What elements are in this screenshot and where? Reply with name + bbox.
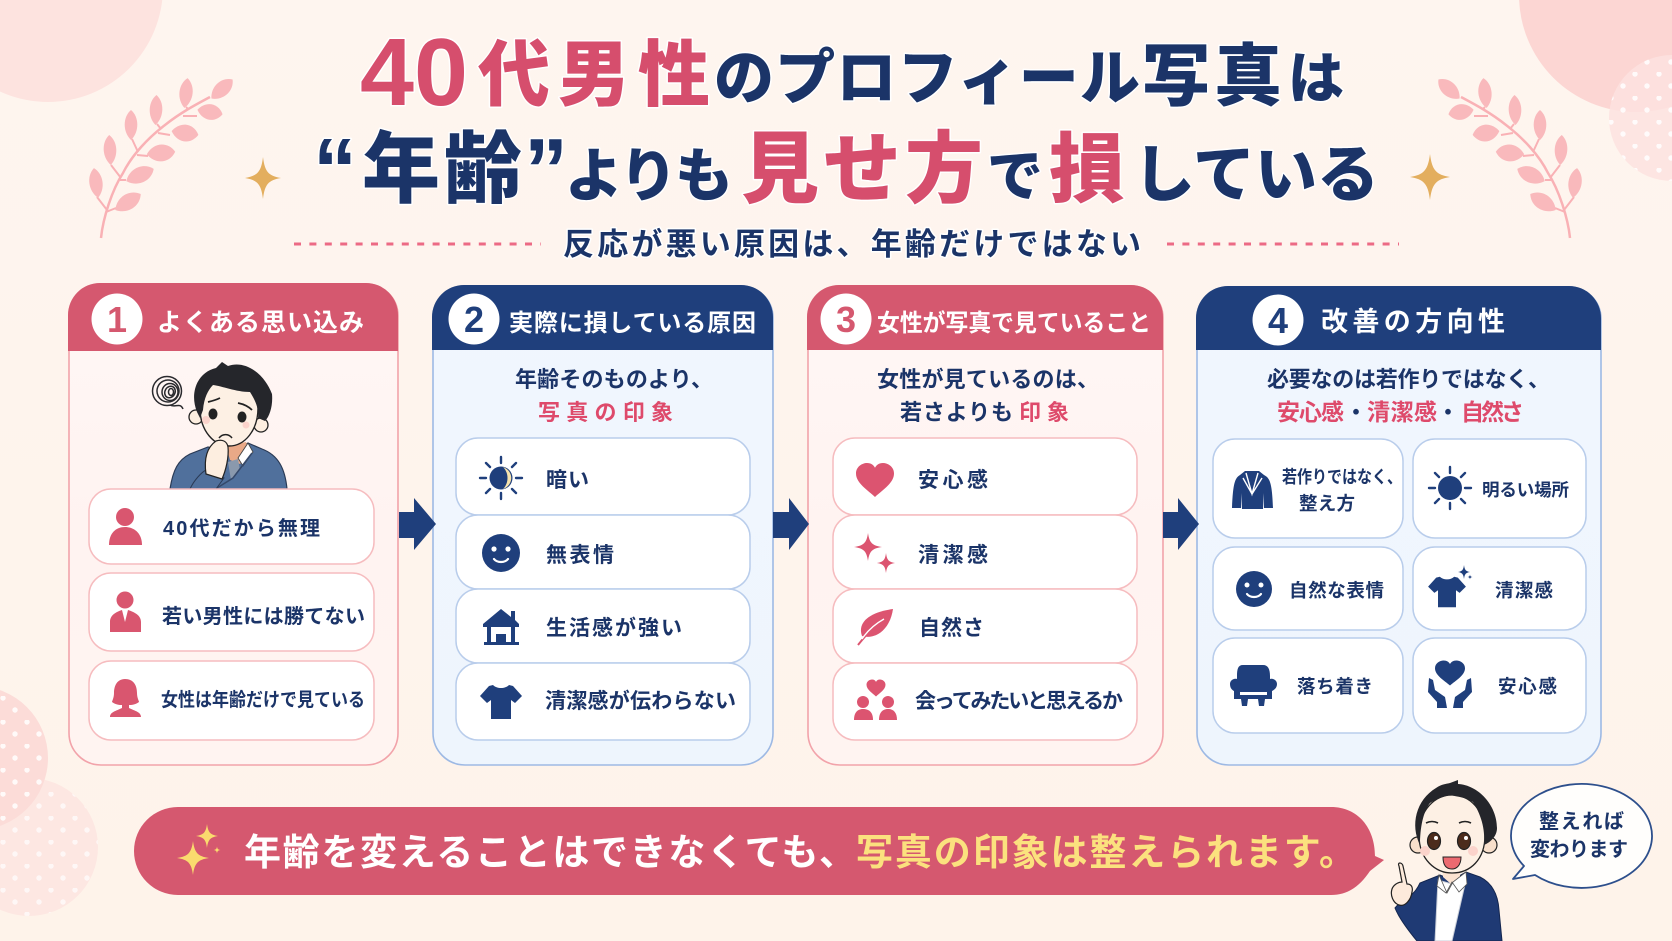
number badge 2: 2 <box>464 299 484 340</box>
panel 4: 改善の方向性 <box>1196 286 1601 765</box>
title: は <box>1288 47 1344 110</box>
card: 安心感: 安心感 <box>1498 676 1557 697</box>
card: 明るい場所: 明るい場所 <box>1482 480 1569 500</box>
banner message: 写真の印象は整えられます。 <box>856 832 1356 873</box>
arrow 3 <box>1163 498 1199 550</box>
panel 3 header <box>807 285 1163 350</box>
title: 40 <box>360 19 468 126</box>
icon: banner sparkles <box>177 824 220 875</box>
icon: shirt with sparkle <box>1428 565 1472 607</box>
panel 1 heading: よくある思い込み <box>157 309 364 337</box>
card: 清潔感が伝わらない <box>456 663 750 740</box>
card: 生活感が強い <box>456 589 750 663</box>
icon: leaf <box>858 609 893 645</box>
title: で <box>987 145 1043 208</box>
card: 若作りではなく、整え方: 整え方 <box>1299 493 1355 514</box>
icon: sparkles <box>854 533 895 573</box>
card: 自然さ: 自然さ <box>919 616 984 640</box>
panel 4 lead text <box>1267 367 1550 425</box>
panel 3: 女性が写真で見ていること <box>807 285 1163 765</box>
title: ” <box>524 120 568 219</box>
number badge 3 <box>820 294 872 344</box>
right gold star <box>1410 154 1450 200</box>
panel 3 lead text <box>877 367 1099 425</box>
panel 3 lead text: 印象 <box>1019 400 1069 425</box>
bottom banner <box>134 807 1384 895</box>
card: 若い男性には勝てない <box>89 573 374 651</box>
icon: hands holding heart <box>1428 660 1472 708</box>
banner message: 年齢を変えることはできなくても、 <box>244 832 856 873</box>
speech bubble: 整えれば <box>1539 810 1624 833</box>
banner message <box>244 832 1356 873</box>
card: 若い男性には勝てない: 若い男性には勝てない <box>162 605 365 628</box>
panel 2 header <box>432 285 773 350</box>
panel 2 lead text <box>515 367 713 425</box>
card: 清潔感: 清潔感 <box>1495 580 1553 601</box>
icon: man in suit <box>110 592 141 632</box>
card: 清潔感が伝わらない: 清潔感が伝わらない <box>545 689 736 713</box>
icon: people and heart <box>854 680 897 720</box>
icon: heart <box>856 463 894 497</box>
left sprig <box>87 74 237 238</box>
arrow 1 <box>399 498 436 550</box>
icon: smiley <box>482 534 520 572</box>
icon: house <box>483 609 519 645</box>
icon: sun <box>1429 467 1471 509</box>
subtitle: 反応が悪い原因は、年齢だけではない <box>563 227 1141 262</box>
card: 無表情 <box>456 515 750 589</box>
title: “ <box>313 120 357 219</box>
panel 4 lead text: 自然さ <box>1461 399 1524 425</box>
card: 明るい場所 <box>1413 439 1586 538</box>
panel 2 heading: 実際に損している原因 <box>509 310 756 337</box>
left gold star <box>245 157 281 199</box>
title: 損 <box>1049 128 1125 213</box>
speech bubble <box>1511 784 1652 888</box>
panel 1: よくある思い込み <box>68 283 398 765</box>
panel 4 header <box>1196 286 1601 350</box>
card: 40代だから無理 <box>89 489 374 564</box>
card: 若作りではなく、整え方: 若作りではなく、 <box>1282 467 1402 487</box>
card: 会ってみたいと思えるか <box>833 663 1137 740</box>
decoration: bottom-left dotted circles <box>0 686 98 916</box>
title: 写真 <box>1142 39 1282 115</box>
card: 清潔感: 清潔感 <box>918 543 988 567</box>
panel 2 lead text: 写真の印象 <box>538 400 673 425</box>
number badge 1 <box>92 294 142 344</box>
number badge 2 <box>448 294 500 344</box>
number badge 4 <box>1252 294 1304 346</box>
card: 暗い <box>456 438 750 515</box>
card: 自然な表情 <box>1213 547 1403 630</box>
card: 女性は年齢だけで見ている: 女性は年齢だけで見ている <box>161 688 365 711</box>
panel 3 lead text: 若さよりも <box>900 400 1013 425</box>
panel 4 lead text: 安心感 <box>1277 399 1344 425</box>
decoration: top-right circle <box>1519 0 1672 112</box>
card: 落ち着き: 落ち着き <box>1297 676 1373 697</box>
card: 自然な表情: 自然な表情 <box>1289 580 1384 601</box>
number badge 3: 3 <box>836 299 856 340</box>
title: よりも <box>565 144 733 209</box>
card: 女性は年齢だけで見ている <box>89 661 374 740</box>
swirl <box>152 376 183 409</box>
title: している <box>1133 141 1379 210</box>
icon: t-shirt <box>480 685 522 719</box>
card: 暗い: 暗い <box>546 469 589 492</box>
icon: armchair <box>1230 665 1277 706</box>
card: 清潔感 <box>833 515 1137 589</box>
decoration: top-right dotted circle <box>1609 55 1672 181</box>
title: 年齢 <box>362 125 522 213</box>
panel 3 heading: 女性が写真で見ていること <box>877 309 1151 337</box>
icon: woman <box>110 679 141 717</box>
panel 4 lead text: 清潔感 <box>1367 399 1437 425</box>
right sprig <box>1434 74 1584 238</box>
number badge 1: 1 <box>107 299 127 340</box>
icon: person <box>109 508 142 545</box>
illustration: smiling man pointing <box>1391 780 1502 941</box>
number badge 4: 4 <box>1268 300 1288 341</box>
decoration: top-left circle <box>0 0 163 102</box>
card: 安心感 <box>1413 638 1586 733</box>
card: 安心感: 安心感 <box>918 468 988 492</box>
title: 代男性 <box>478 36 710 116</box>
arrow 2 <box>773 498 809 550</box>
icon: smiley <box>1236 571 1272 607</box>
panel 1 header <box>68 283 398 351</box>
card: 安心感 <box>833 438 1137 515</box>
panel 4 lead text: ・ <box>1345 400 1367 425</box>
title: 見せ方 <box>741 125 983 213</box>
card: 無表情: 無表情 <box>546 544 614 567</box>
card: 若作りではなく、整え方 <box>1213 439 1403 538</box>
card: 清潔感 <box>1413 547 1586 630</box>
panel 3 lead text: 女性が見ているのは、 <box>877 367 1099 392</box>
icon: half sun <box>480 457 522 499</box>
card: 自然さ <box>833 589 1137 663</box>
panel 4 heading: 改善の方向性 <box>1321 307 1505 337</box>
card: 生活感が強い: 生活感が強い <box>546 616 682 640</box>
card: 落ち着き <box>1213 638 1403 733</box>
title: のプロフィール <box>714 45 1140 112</box>
panel 4 lead text: ・ <box>1437 400 1459 425</box>
card: 40代だから無理: 40代だから無理 <box>163 517 320 540</box>
panel 2 lead text: 年齢そのものより、 <box>515 367 713 392</box>
title <box>313 19 1379 219</box>
illustration: worried man <box>152 362 287 489</box>
icon: jacket <box>1232 471 1273 509</box>
panel 2: 実際に損している原因 <box>432 285 773 765</box>
panel 4 lead text: 必要なのは若作りではなく、 <box>1267 367 1550 392</box>
speech bubble: 変わります <box>1530 838 1628 861</box>
card: 会ってみたいと思えるか: 会ってみたいと思えるか <box>915 690 1123 713</box>
